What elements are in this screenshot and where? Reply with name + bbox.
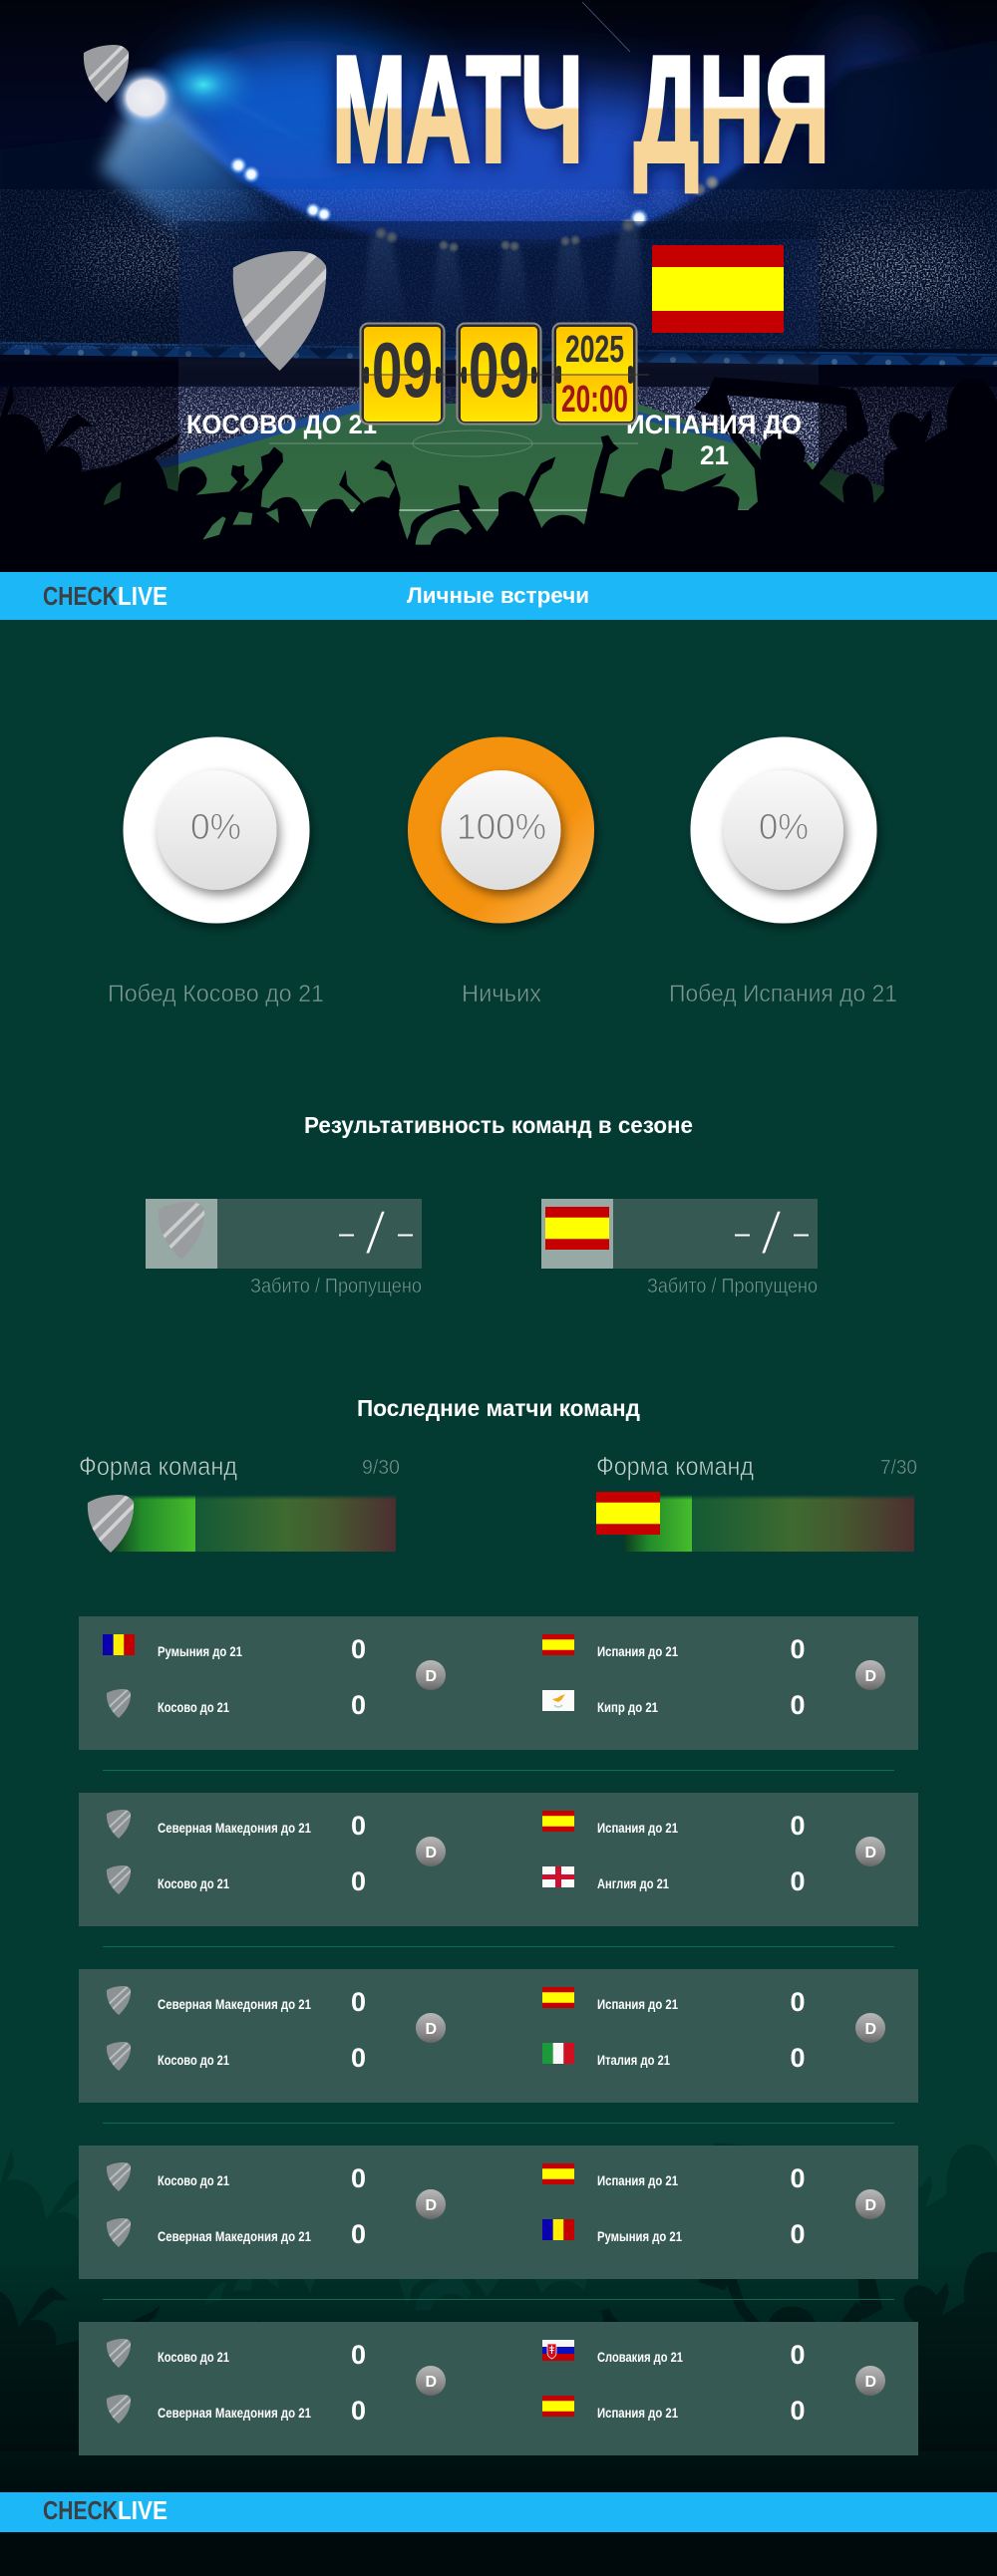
form: Spain — [596, 1451, 917, 1552]
right match: 0 — [790, 2163, 806, 2193]
right match — [542, 2163, 885, 2249]
stands speckle — [0, 189, 997, 516]
match card 3 — [79, 1969, 918, 2103]
pitch — [0, 404, 997, 572]
left match: Румыния до 21 — [158, 1643, 242, 1659]
match card 4 — [79, 2146, 918, 2279]
left match: Косово до 21 — [158, 2172, 229, 2188]
left match: 0 — [351, 2163, 366, 2193]
goals panel: Kosovo: – — [398, 1217, 413, 1250]
form: Spain: Форма команд — [596, 1451, 754, 1481]
right match: Испания до 21 — [597, 1820, 678, 1836]
title: МАТЧ ДНЯ: МАТЧ — [332, 25, 583, 194]
left match: 0 — [351, 2043, 366, 2073]
left match: Северная Македония до 21 — [158, 2405, 311, 2421]
right match: 0 — [790, 1634, 806, 1664]
day card — [359, 323, 445, 425]
left match: Косово до 21 — [158, 1875, 229, 1891]
stat: Kosovo wins — [108, 737, 324, 1007]
hero stadium background — [0, 0, 997, 572]
left match: D — [425, 2021, 437, 2038]
light columns — [359, 223, 644, 339]
heading: season performance: Результативность команд в сезоне — [304, 1112, 693, 1138]
left match: 0 — [351, 2396, 366, 2426]
lamps — [229, 2, 720, 253]
LED strip and lower stands — [0, 342, 997, 395]
left match: 0 — [351, 1634, 366, 1664]
left match — [103, 1634, 446, 1720]
left match: 0 — [351, 1690, 366, 1720]
team logo: Kosovo — [233, 251, 330, 371]
right match: Испания до 21 — [597, 2405, 678, 2421]
crowd silhouette hero — [0, 377, 997, 578]
left match: Косово до 21 — [158, 2349, 229, 2365]
stat: Kosovo wins: 0% — [190, 806, 241, 847]
goals panel: Kosovo: / — [364, 1200, 387, 1267]
right match: D — [865, 1845, 876, 1861]
right match: 0 — [790, 2043, 806, 2073]
side darkening outside panel — [0, 361, 997, 572]
form: Kosovo: Форма команд — [79, 1451, 237, 1481]
right match: Словакия до 21 — [597, 2349, 683, 2365]
icon: small shield top left — [84, 45, 131, 103]
right match — [542, 1811, 885, 1896]
left match: Северная Македония до 21 — [158, 1996, 311, 2012]
logo: CheckLive footer: CHECK — [43, 2495, 118, 2525]
goals panel: Spain: Забито / Пропущено — [647, 1276, 818, 1297]
goals panel: Spain: – — [735, 1217, 750, 1250]
left match: 0 — [351, 2219, 366, 2249]
right match: D — [865, 1668, 876, 1685]
goals panel: Kosovo: Забито / Пропущено — [250, 1276, 422, 1297]
left match: D — [425, 2374, 437, 2391]
stat: draws: 100% — [457, 806, 546, 847]
title: МАТЧ ДНЯ: ДНЯ — [634, 25, 830, 194]
right match — [542, 1634, 885, 1720]
spotlight beam — [100, 105, 294, 249]
right match: 0 — [790, 1866, 806, 1896]
left match: D — [425, 1668, 437, 1685]
right match: 0 — [790, 1690, 806, 1720]
team logo: Spain flag — [652, 245, 784, 333]
stand base colour — [178, 239, 819, 346]
month card — [457, 323, 542, 425]
goals panel: Kosovo: – — [339, 1217, 354, 1250]
year and time card — [552, 323, 638, 425]
left match — [107, 1986, 446, 2073]
right match: D — [865, 2021, 876, 2038]
right match: 0 — [790, 2219, 806, 2249]
right match: Испания до 21 — [597, 2172, 678, 2188]
form: Kosovo — [79, 1451, 400, 1553]
crowd silhouette footer background — [0, 2143, 997, 2576]
top bar — [0, 572, 997, 620]
left match — [107, 2162, 446, 2249]
right match: 0 — [790, 1987, 806, 2017]
right match — [542, 1987, 885, 2073]
right match: D — [865, 2197, 876, 2214]
year and time card: 2025 — [565, 329, 624, 371]
left match: Косово до 21 — [158, 2052, 229, 2068]
match card 5 — [79, 2322, 918, 2455]
left match — [107, 2339, 446, 2426]
stat: Spain wins: Побед Испания до 21 — [669, 981, 897, 1007]
left match: 0 — [351, 1987, 366, 2017]
stat: Kosovo wins: Побед Косово до 21 — [108, 981, 324, 1007]
right match: Испания до 21 — [597, 1996, 678, 2012]
left match: 0 — [351, 1866, 366, 1896]
left match: D — [425, 2197, 437, 2214]
match dividers — [103, 1770, 894, 2300]
match card 1 — [79, 1616, 918, 1750]
team name: Kosovo: КОСОВО ДО 21 — [186, 410, 377, 439]
flip date cards — [359, 323, 649, 425]
goals panel: Spain: / — [760, 1200, 783, 1267]
left match: Косово до 21 — [158, 1699, 229, 1715]
stat: draws — [408, 737, 594, 1007]
right match: Испания до 21 — [597, 1643, 678, 1659]
right match: D — [865, 2374, 876, 2391]
left match: 0 — [351, 2340, 366, 2370]
match card 2 — [79, 1793, 918, 1926]
right match: Италия до 21 — [597, 2052, 670, 2068]
team name: Spain — [626, 410, 802, 470]
right match: 0 — [790, 1811, 806, 1841]
goals panel: Spain: – — [794, 1217, 809, 1250]
right match — [542, 2340, 885, 2426]
hero match panel — [178, 221, 819, 572]
team name: Spain: 21 — [700, 440, 729, 470]
right match: Англия до 21 — [597, 1875, 669, 1891]
right match: 0 — [790, 2396, 806, 2426]
logo: CheckLive: CHECK — [43, 581, 118, 611]
bottom bar — [0, 2492, 997, 2532]
logo: CheckLive: LIVE — [118, 581, 167, 611]
logo: CheckLive footer: LIVE — [118, 2495, 167, 2525]
left match — [107, 1810, 446, 1896]
goals panel: Kosovo — [146, 1199, 422, 1297]
left match: Северная Македония до 21 — [158, 1820, 311, 1836]
year and time card: 20:00 — [561, 379, 628, 421]
month card: 09 — [469, 326, 529, 414]
left match: 0 — [351, 1811, 366, 1841]
stat: Spain wins — [669, 737, 897, 1007]
right match: 0 — [790, 2340, 806, 2370]
stat: draws: Ничьих — [462, 981, 541, 1007]
goals panel: Spain — [541, 1199, 818, 1297]
left match: Северная Македония до 21 — [158, 2228, 311, 2244]
day card: 09 — [372, 326, 433, 414]
right match: Кипр до 21 — [597, 1699, 658, 1715]
form: Spain: 7/30 — [880, 1457, 917, 1479]
team name: Spain: ИСПАНИЯ ДО — [626, 410, 802, 439]
stat: Spain wins: 0% — [759, 806, 809, 847]
right match: Румыния до 21 — [597, 2228, 682, 2244]
form: Kosovo: 9/30 — [362, 1457, 400, 1479]
left match: D — [425, 1845, 437, 1861]
heading: last matches: Последние матчи команд — [357, 1395, 640, 1421]
heading: head-to-head: Личные встречи — [407, 583, 589, 608]
dark lower stadium bowl — [0, 40, 997, 572]
